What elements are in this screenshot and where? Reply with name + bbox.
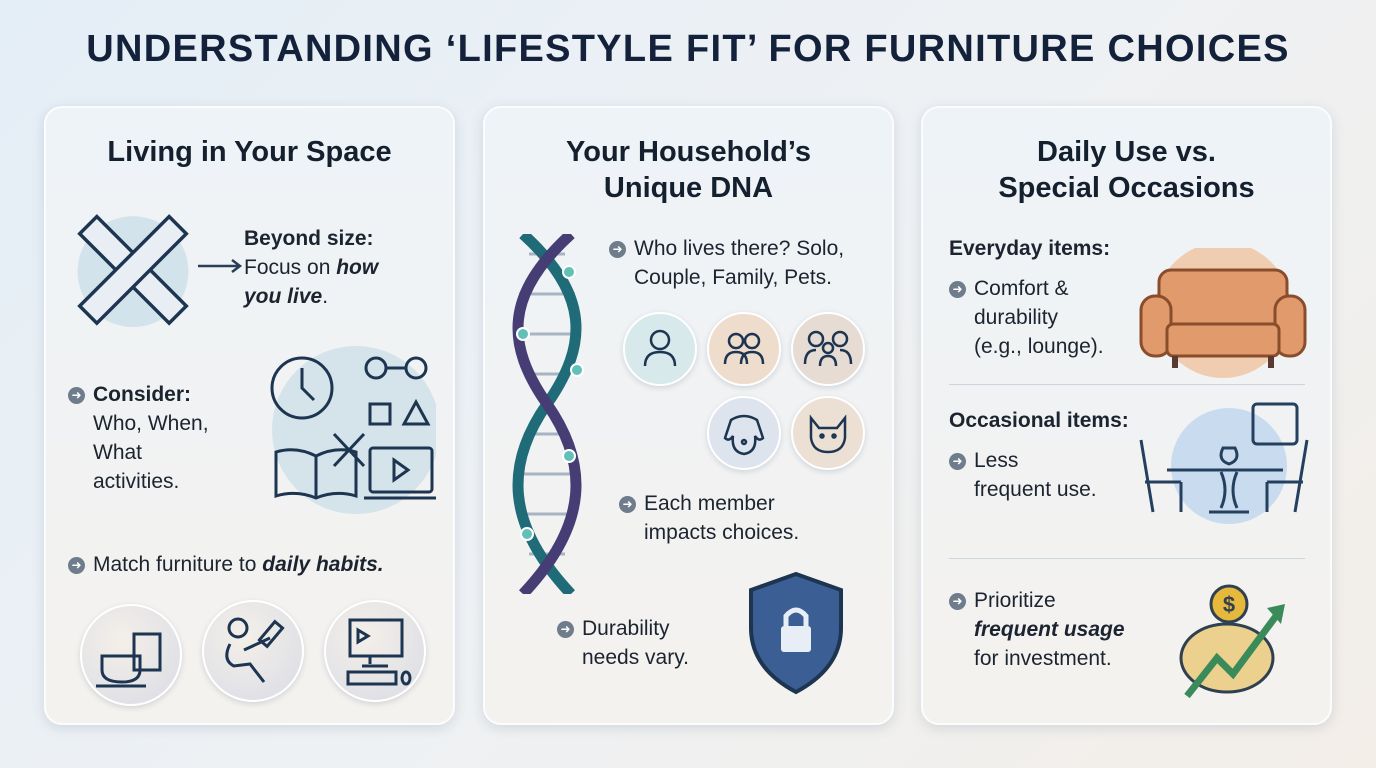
heading [566, 136, 811, 204]
icon: couple [707, 312, 781, 386]
text: match furniture: ➜ [71, 558, 82, 572]
text: comfort: durability [974, 306, 1058, 329]
icon: shield lock [749, 572, 843, 694]
text: comfort: Comfort & [974, 277, 1069, 300]
text: each member: ➜ [622, 497, 633, 511]
text: consider: activities. [93, 470, 179, 493]
icon: relaxing person [202, 600, 304, 702]
text: durability: Durability [582, 617, 670, 640]
text: who lives there: ➜ [612, 242, 623, 256]
heading [998, 136, 1255, 204]
icon: sofa [1140, 248, 1306, 378]
icon: cat [791, 396, 865, 470]
heading: Your Household’s [566, 136, 811, 168]
heading: Daily Use vs. [1037, 136, 1216, 168]
panel: daily vs special [921, 106, 1332, 725]
text: consider: Consider: [93, 383, 191, 406]
icon: dining table [1140, 402, 1308, 524]
text: durability [557, 617, 689, 669]
text: consider: What [93, 441, 142, 464]
text: consider: Who, When, [93, 412, 209, 435]
text: each member: impacts choices. [644, 521, 799, 544]
text: beyond size: Focus on how [244, 256, 378, 279]
text: prioritize: Prioritize [974, 589, 1056, 612]
text: occasional items: Occasional items: [949, 409, 1129, 432]
text: each member [619, 492, 799, 544]
text: prioritize: frequent usage [974, 618, 1125, 641]
icon: piggy bank [1180, 584, 1285, 698]
text: match furniture: Match furniture to daily habits. [93, 553, 384, 576]
text: prioritize: for investment. [974, 647, 1112, 670]
arrow [198, 259, 242, 273]
text: beyond size: Beyond size: [244, 227, 374, 250]
heading: Unique DNA [604, 172, 773, 204]
text: who lives there: Who lives there? Solo, [634, 237, 844, 260]
panel: living in your space [44, 106, 455, 725]
icon: activities cluster [270, 346, 436, 514]
text: comfort [949, 277, 1104, 358]
panel: household DNA [483, 106, 894, 725]
text: prioritize: ➜ [952, 594, 963, 608]
icon: solo [623, 312, 697, 386]
icon: piggy bank: $ [1223, 592, 1235, 617]
heading: Special Occasions [998, 172, 1255, 204]
text: less frequent: Less [974, 449, 1018, 472]
text: durability: needs vary. [582, 646, 689, 669]
icon: computer [324, 600, 426, 702]
text: consider: ➜ [71, 388, 82, 402]
heading: Living in Your Space [107, 136, 392, 168]
text: prioritize [949, 589, 1125, 670]
icon: crossed rulers [77, 214, 189, 327]
text: who lives there: Couple, Family, Pets. [634, 266, 832, 289]
text: less frequent: frequent use. [974, 478, 1097, 501]
text: less frequent [949, 449, 1097, 501]
text: durability: ➜ [560, 622, 571, 636]
text: everyday items: Everyday items: [949, 237, 1110, 260]
text: comfort: (e.g., lounge). [974, 335, 1104, 358]
icon: coffee and book [80, 604, 182, 706]
icon: DNA helix [512, 234, 584, 594]
text: comfort: ➜ [952, 282, 963, 296]
text: less frequent: ➜ [952, 454, 963, 468]
text: beyond size [243, 227, 380, 308]
title: UNDERSTANDING ‘LIFESTYLE FIT’ FOR FURNITURE CHOICES [86, 28, 1290, 70]
text: beyond size: you live. [244, 285, 328, 308]
text: who lives there [609, 237, 844, 289]
icon: family [791, 312, 865, 386]
icon: dog [707, 396, 781, 470]
text: each member: Each member [644, 492, 775, 515]
text: consider [68, 383, 209, 493]
